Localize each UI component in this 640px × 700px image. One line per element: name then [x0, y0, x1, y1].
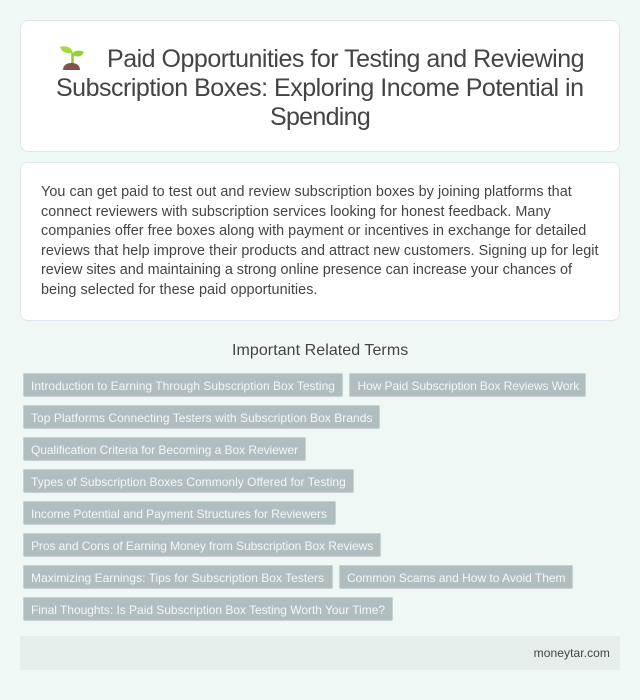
- panel: title card: [20, 20, 620, 152]
- icon: seedling: [60, 46, 84, 70]
- panel: term tags: Top Platforms Connecting Testers with Subscription Box Brands: [31, 411, 373, 425]
- panel: term tags: Pros and Cons of Earning Money from Subscription Box Reviews: [31, 539, 373, 553]
- footer source: moneytar.com: [534, 646, 610, 660]
- description text: [41, 184, 599, 298]
- panel: term tags: Common Scams and How to Avoid Them: [347, 571, 566, 585]
- footer bar: [20, 636, 620, 670]
- panel: term tags: Maximizing Earnings: Tips for Subscription Box Testers: [31, 571, 324, 585]
- panel: description card: [20, 162, 620, 321]
- description text: review sites and maintaining a strong online presence can increase your chances of: [41, 262, 572, 278]
- title: Paid Opportunities for Testing and Reviewing: [107, 45, 584, 73]
- panel: term tags: How Paid Subscription Box Reviews Work: [358, 379, 579, 393]
- panel: term tags: Introduction to Earning Through Subscription Box Testing: [31, 379, 335, 393]
- panel: term tags: Qualification Criteria for Becoming a Box Reviewer: [31, 443, 298, 457]
- panel: term tags: Final Thoughts: Is Paid Subscription Box Testing Worth Your Time?: [31, 603, 385, 617]
- title: Subscription Boxes: Exploring Income Potential in: [56, 74, 584, 102]
- description text: connect reviewers with subscription services looking for honest feedback. Many: [41, 204, 551, 220]
- panel: term tags: Income Potential and Payment Structures for Reviewers: [31, 507, 327, 521]
- description text: You can get paid to test out and review subscription boxes by joining platforms that: [41, 184, 572, 200]
- panel: term tags: Types of Subscription Boxes Commonly Offered for Testing: [31, 475, 346, 489]
- description text: companies offer free boxes along with payment or incentives in exchange for detailed: [41, 223, 586, 239]
- panel: term tags: [23, 373, 586, 621]
- description text: reviews that help improve their products and attract new customers. Signing up for legit: [41, 243, 599, 259]
- title: Spending: [270, 103, 370, 131]
- heading: related terms: Important Related Terms: [232, 342, 408, 359]
- title: [56, 45, 584, 131]
- description text: being selected for these paid opportunities.: [41, 282, 318, 298]
